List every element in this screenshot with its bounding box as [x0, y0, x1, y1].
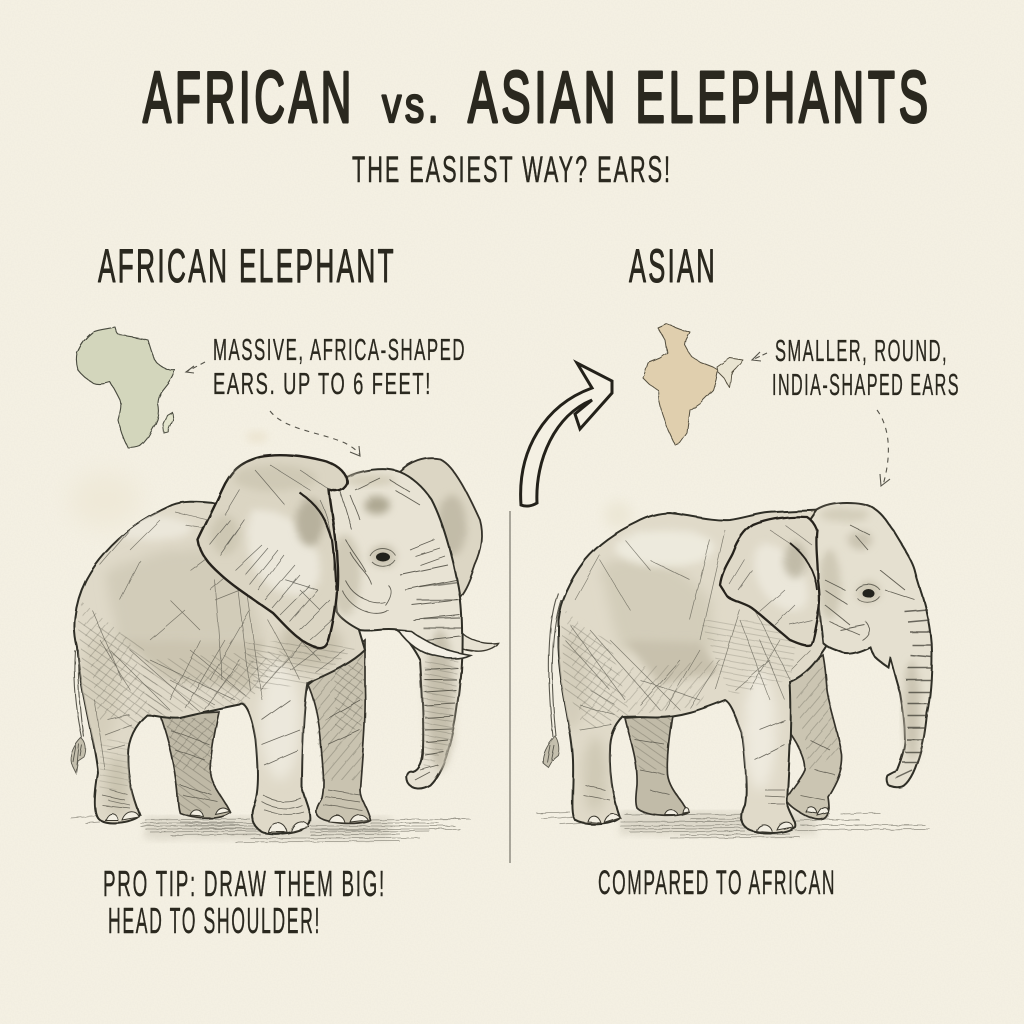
head	[328, 469, 462, 789]
body dense hatching	[560, 610, 800, 730]
title: vs.	[382, 77, 442, 133]
icon: map of India	[643, 324, 743, 445]
text: pro tip: PRO TIP: DRAW THEM BIG!	[103, 863, 386, 904]
text: pro tip	[103, 863, 386, 941]
arrow: text to Asian ear	[877, 410, 890, 486]
eye	[370, 545, 396, 567]
callout: Asian ears text	[772, 333, 960, 402]
arrow: text to African ear	[270, 411, 360, 456]
eye	[855, 581, 880, 603]
divider	[509, 511, 511, 863]
far tusk	[462, 633, 498, 651]
body hatching	[565, 530, 810, 730]
leg wrinkles	[102, 700, 362, 814]
trunk bold rings	[417, 582, 461, 628]
head and trunk wrinkles	[340, 478, 460, 780]
near ear	[198, 455, 347, 648]
callout: African ears text: EARS. UP TO 6 FEET!	[213, 366, 432, 401]
title: AFRICAN	[143, 58, 355, 138]
body dense hatching	[78, 600, 360, 790]
ground shadow	[536, 811, 930, 838]
head washes	[364, 496, 390, 514]
callout: African ears text: MASSIVE, AFRICA-SHAPED	[213, 332, 466, 367]
callout: African ears text	[213, 332, 466, 401]
ground shadow	[70, 816, 470, 842]
head and trunk wrinkles	[825, 525, 915, 640]
head and trunk	[810, 503, 932, 787]
illustration: African elephant	[70, 455, 498, 842]
heading: African elephant: AFRICAN ELEPHANT	[98, 239, 396, 292]
trunk rings	[895, 610, 932, 778]
far rear leg	[625, 715, 688, 816]
heading: Asian: ASIAN	[629, 239, 717, 292]
text: pro tip: HEAD TO SHOULDER!	[108, 900, 321, 941]
body washes	[80, 516, 342, 815]
leg wrinkles	[583, 720, 835, 804]
far ear	[400, 458, 482, 597]
toenails	[588, 807, 829, 832]
far rear leg	[160, 712, 230, 818]
ear washes	[247, 509, 320, 595]
icon: curved transition arrow	[521, 363, 612, 506]
ear hatching	[730, 525, 812, 625]
tail	[543, 593, 561, 767]
far front leg	[308, 640, 370, 823]
body hatching	[92, 512, 345, 805]
ear washes	[753, 544, 808, 611]
near tusk	[398, 630, 470, 658]
title	[143, 58, 932, 138]
tail	[71, 650, 86, 773]
arrow: text to India map	[752, 352, 767, 361]
body silhouette	[74, 478, 365, 834]
head washes	[848, 531, 872, 549]
subtitle: THE EASIEST WAY? EARS!	[352, 149, 672, 190]
icon: map of Africa	[76, 327, 175, 448]
illustration: Asian elephant	[536, 503, 932, 838]
toenails	[105, 808, 368, 832]
body silhouette	[558, 510, 830, 833]
body washes	[556, 530, 776, 813]
near ear	[720, 517, 820, 645]
ear hatching	[210, 465, 333, 640]
far front leg	[786, 655, 842, 820]
arrow: text to Africa map	[186, 362, 205, 373]
